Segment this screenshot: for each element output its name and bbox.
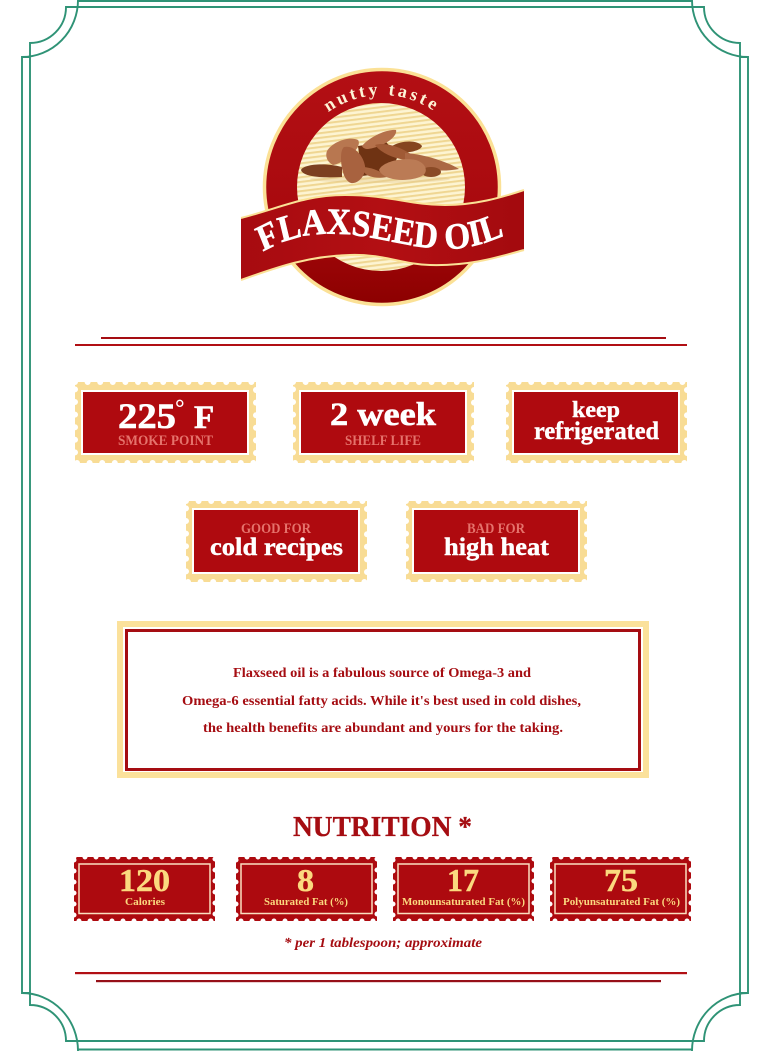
nutrition stamp: polyunsaturated fat [550, 857, 691, 921]
seed cluster backing [358, 142, 398, 176]
seed [364, 167, 387, 178]
seed [362, 130, 396, 149]
seed [301, 164, 342, 177]
striped centre [297, 103, 465, 271]
stamp: good for cold recipes: cold recipes [210, 534, 343, 561]
seed [341, 147, 365, 183]
nutrition stamp: polyunsaturated fat: 75 [604, 862, 638, 898]
nutrition stamp: saturated fat: 8 [297, 862, 314, 898]
nutrition stamp: saturated fat [236, 857, 377, 921]
badge ring [264, 70, 500, 304]
stamp: smoke point: 225 [118, 396, 176, 436]
description text: the health benefits are abundant and yours for the taking. [203, 720, 563, 735]
footnote: * per 1 tablespoon; approximate [284, 936, 482, 951]
nutrition stamp: polyunsaturated fat: Polyunsaturated Fat (%) [563, 896, 680, 908]
seed [392, 142, 422, 153]
stamp: bad for high heat [406, 501, 587, 582]
stamp: bad for high heat: high heat [444, 534, 550, 561]
seed [379, 159, 426, 180]
description text: Flaxseed oil is a fabulous source of Omega-3 and [233, 665, 532, 680]
icon: flax seeds [301, 130, 459, 183]
description text [182, 665, 581, 735]
curved tagline: nutty taste [324, 85, 436, 112]
nutrition stamp: monounsaturated fat [393, 857, 534, 921]
stamp: smoke point: ° [175, 396, 185, 422]
seed [405, 153, 459, 171]
seed shadow [310, 175, 450, 183]
stamp: keep refrigerated: keep [572, 397, 620, 422]
description panel [120, 624, 646, 775]
nutrition stamp: calories: 120 [119, 862, 170, 898]
stamp: shelf life: 2 week [330, 397, 437, 433]
stamp: keep refrigerated: refrigerated [534, 418, 659, 445]
stamp: keep refrigerated [506, 382, 687, 463]
ribbon banner [240, 189, 524, 281]
stamp: smoke point: F [194, 400, 214, 436]
nutrition stamp: monounsaturated fat: 17 [447, 862, 479, 898]
top divider [75, 337, 687, 346]
logo badge [240, 68, 524, 306]
stamp: shelf life [293, 382, 474, 463]
bottom divider [75, 972, 687, 982]
ribbon title: FLAXSEED OIL [254, 209, 503, 252]
nutrition stamp: calories [74, 857, 215, 921]
stamp: shelf life: SHELF LIFE [345, 433, 421, 449]
nutrition stamp: saturated fat: Saturated Fat (%) [264, 896, 348, 908]
seed [375, 144, 418, 160]
seed [326, 139, 359, 165]
seed [421, 167, 441, 177]
nutrition stamp: calories: Calories [125, 896, 166, 908]
curved tagline [324, 85, 436, 112]
stamp: smoke point: SMOKE POINT [118, 433, 213, 449]
stamp: good for cold recipes [186, 501, 367, 582]
stamp: smoke point [75, 382, 256, 463]
stamp: good for cold recipes: GOOD FOR [241, 521, 311, 537]
nutrition heading: NUTRITION * [293, 812, 472, 843]
description text: Omega-6 essential fatty acids. While it's best used in cold dishes, [182, 693, 581, 708]
stamp: bad for high heat: BAD FOR [467, 521, 525, 537]
nutrition stamp: monounsaturated fat: Monounsaturated Fat (%) [402, 896, 525, 908]
